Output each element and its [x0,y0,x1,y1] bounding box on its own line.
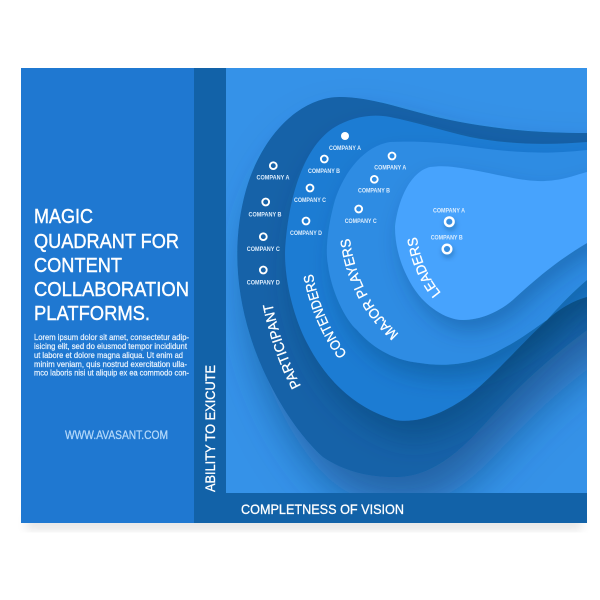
participant companies: COMPANY C [247,246,280,253]
body text: ut labore et dolore magna aliqua. Ut enim ad [34,351,183,360]
participant companies: COMPANY A [256,174,290,182]
contenders companies: COMPANY A [329,145,361,152]
title [34,205,189,325]
panel: left intro [21,68,194,523]
participant companies: COMPANY D [247,280,280,286]
contenders companies: COMPANY C [294,197,326,204]
chart: nested bands [237,97,600,477]
page shadow [26,516,582,530]
contenders companies: COMPANY D [290,230,322,237]
contenders companies: COMPANY B [308,168,340,175]
label: participant: PARTICIPANT [262,305,301,390]
major players companies: COMPANY B [358,188,390,194]
band: major players [327,142,600,365]
panel: axis strips [194,68,587,523]
title: COLLABORATION [34,278,189,301]
title: QUADRANT FOR [34,230,179,253]
band: leaders [395,165,600,320]
leaders companies: COMPANY B [431,234,463,242]
label: leaders: LEADERS [408,238,440,298]
band: participant [237,97,600,477]
leaders companies [431,208,465,253]
major players companies [345,153,407,225]
website link: WWW.AVASANT.COM [65,430,168,442]
body text: minim veniam, quis nostrud exercitation ulla- [34,360,187,369]
chart background [226,68,587,493]
body text: isicing elit, sed do eiusmod tempor incididunt [34,342,188,351]
label: major players: MAJOR PLAYERS [340,239,398,340]
leaders companies: COMPANY A [433,208,465,214]
y axis label: ABILITY TO EXICUTE [202,365,218,492]
body text [34,333,189,378]
participant companies [247,162,290,286]
infographic canvas [21,68,587,532]
title: PLATFORMS. [34,302,150,325]
label: contenders: CONTENDERS [304,274,346,358]
major players companies: COMPANY A [374,164,407,172]
participant companies: COMPANY B [248,212,282,218]
body text: Lorem ipsum dolor sit amet, consectetur adip- [34,333,189,342]
x axis label: COMPLETNESS OF VISION [241,501,404,517]
title: MAGIC [34,205,93,228]
body text: mco laboris nisi ut aliquip ex ea commodo con- [34,368,189,378]
major players companies: COMPANY C [345,218,377,225]
band labels [262,238,440,390]
title: CONTENT [34,254,122,277]
band: contenders [285,116,600,421]
contenders companies [290,132,361,237]
